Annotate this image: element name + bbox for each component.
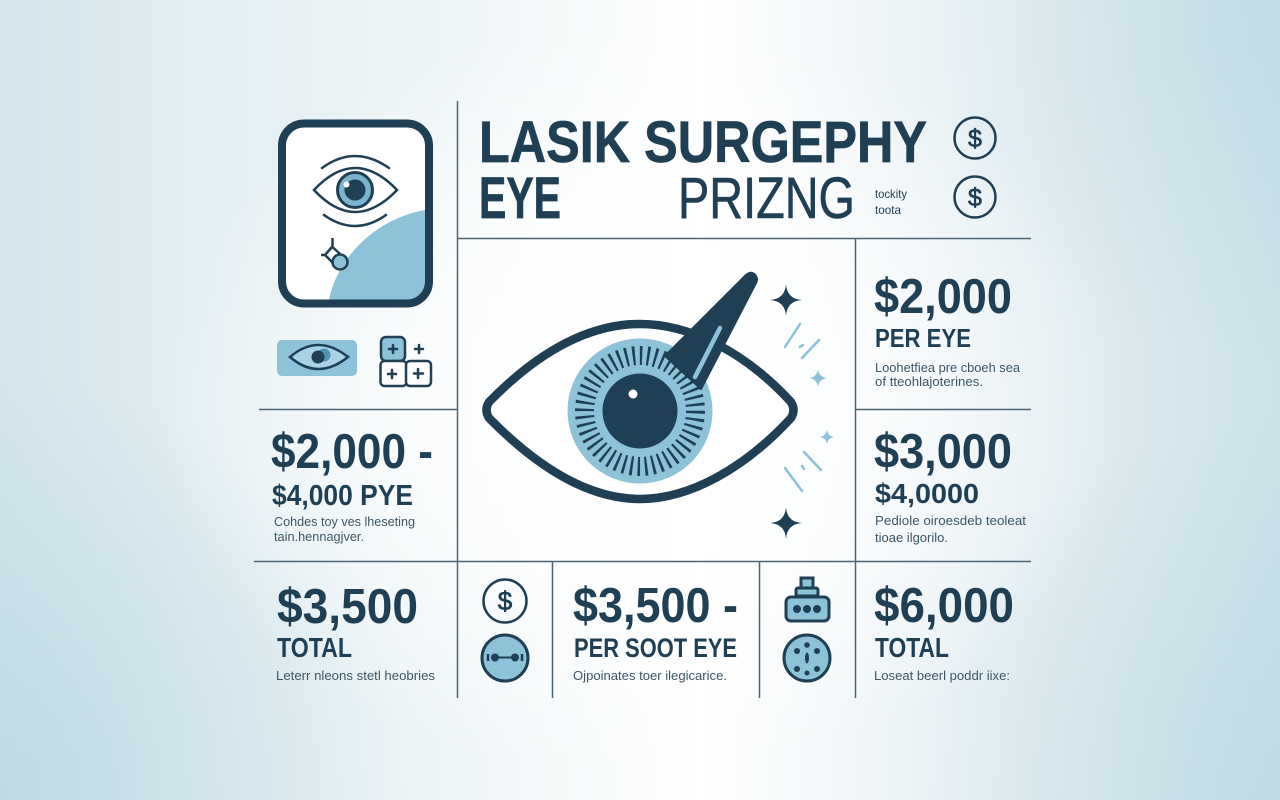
iris: [568, 338, 712, 484]
pupil: [602, 374, 678, 448]
icon: dumbbell badge: [482, 635, 528, 681]
icon: medical blocks: [380, 337, 431, 386]
icon: card small instrument: [321, 238, 348, 270]
eye outline: [486, 324, 794, 499]
panel: left total: [276, 580, 436, 683]
panel: right price range: $3,000: [874, 425, 1012, 479]
panel: right per eye: $2,000: [874, 270, 1012, 324]
panel: bottom right total: TOTAL: [875, 632, 949, 663]
panel: right per eye: [874, 270, 1021, 389]
title: EYE: [479, 166, 561, 231]
icon: dollar coin lower left: [484, 580, 526, 622]
title: PRIZNG: [678, 166, 855, 231]
panel: right per eye: of tteohlajoterines.: [875, 374, 983, 389]
panel: left total: Leterr nleons stetl heobries: [276, 668, 436, 683]
panel: right per eye: Loohetfiea pre cboeh sea: [875, 360, 1021, 375]
grid dividers: [254, 101, 1031, 698]
card outline: [282, 124, 429, 304]
panel: bottom right total: Loseat beerl poddr iixe:: [874, 668, 1010, 683]
panel: right price range: $4,0000: [875, 478, 979, 509]
icon: small eye badge: [277, 340, 357, 376]
icon: dollar coin top: $: [968, 125, 982, 153]
panel: bottom right total: $6,000: [874, 579, 1014, 633]
laser highlight stripe: [695, 328, 720, 377]
panel: right per eye: PER EYE: [875, 323, 971, 353]
panel: left total: $3,500: [277, 580, 418, 634]
small title note: tockity: [875, 187, 907, 201]
icon: dollar coin top: [954, 118, 996, 158]
icon: bottle device: [786, 578, 829, 621]
iris radial ticks: [584, 356, 696, 466]
small title note: toota: [875, 203, 901, 217]
icon: card eye: [314, 156, 397, 226]
panel: middle price: [573, 579, 738, 683]
icon: dollar coin bottom: $: [968, 184, 982, 212]
panel: bottom right total: [874, 579, 1014, 683]
title: LASIK SURGEPHY: [479, 110, 927, 175]
icon: dollar coin bottom: [954, 176, 996, 218]
panel: right price range: [874, 425, 1026, 545]
panel: left price range: $2,000 -: [271, 425, 433, 479]
card blue corner shape: [329, 210, 425, 300]
panel: middle price: Ojpoinates toer ilegicarice.: [573, 668, 727, 683]
small title note: [875, 187, 907, 217]
panel: left price range: tain.hennagjver.: [274, 529, 364, 544]
title: [479, 110, 927, 231]
sparkles and light rays: [770, 284, 834, 539]
panel: middle price: PER SOOT EYE: [574, 633, 737, 663]
panel: left price range: $4,000 PYE: [272, 480, 413, 512]
icon: dollar coin lower left: $: [498, 586, 513, 616]
laser wedge: [665, 273, 757, 389]
pupil highlight: [628, 390, 638, 398]
panel: right price range: tioae ilgorilo.: [875, 530, 948, 545]
panel: left total: TOTAL: [277, 632, 352, 663]
panel: right price range: Pediole oiroesdeb teoleat: [875, 513, 1026, 528]
central eye illustration: [486, 273, 794, 499]
panel: middle price: $3,500 -: [573, 579, 738, 633]
icon: dotted circle badge: [784, 635, 830, 681]
panel: eye illustration card: [282, 124, 429, 304]
panel: left price range: [271, 425, 433, 544]
panel: left price range: Cohdes toy ves lheseting: [274, 514, 415, 529]
